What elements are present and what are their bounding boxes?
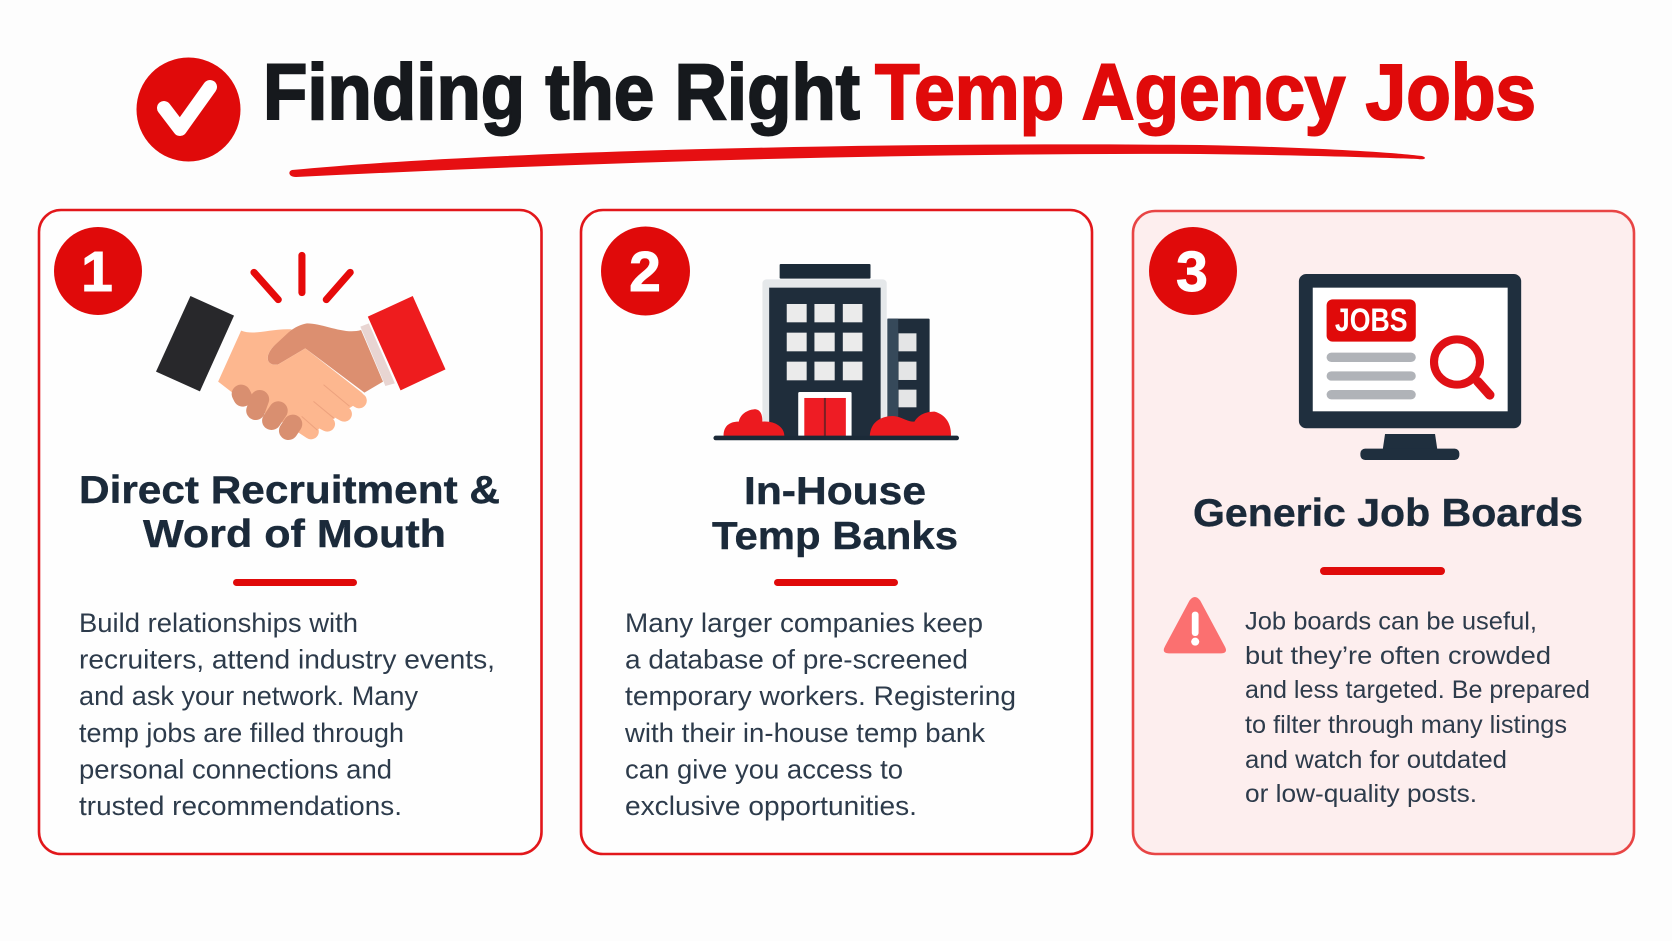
body text: temp jobs are filled through [79,718,404,748]
body text: temporary workers. Registering [625,681,1016,711]
body text: with their in-house temp bank [624,718,986,748]
title [263,47,1536,136]
heading: Generic Job Boards [1193,492,1583,535]
body text: and ask your network. Many [79,681,419,711]
body text: trusted recommendations. [79,791,402,821]
icon: title check badge [136,58,240,162]
warning text: but they’re often crowded [1245,642,1551,670]
warning text: Job boards can be useful, [1245,608,1537,636]
body text: can give you access to [625,754,903,784]
number badge 2: 2 [629,240,661,304]
icon: office building [713,264,959,440]
divider [233,579,357,586]
warning text: to filter through many listings [1245,711,1567,739]
body text [79,608,495,821]
body text: recruiters, attend industry events, [79,644,495,674]
panel: in-house temp banks [581,210,1092,854]
warning text: or low-quality posts. [1245,780,1477,808]
body text: a database of pre-screened [625,644,968,674]
title underline [289,144,1425,177]
heading: Word of Mouth [143,513,446,556]
body text: exclusive opportunities. [625,791,917,821]
number badge 2 [601,226,690,316]
warning text [1245,608,1590,808]
body text: personal connections and [79,754,392,784]
icon: monitor with job listings [1299,274,1521,460]
number badge 1 [54,227,142,315]
number badge 3: 3 [1176,240,1208,304]
heading [79,469,500,556]
icon: monitor with job listings: JOBS [1335,302,1408,338]
body text: Build relationships with [79,608,358,638]
divider [1320,567,1445,575]
heading: Temp Banks [712,515,958,558]
heading [712,470,958,558]
body text [624,608,1016,821]
warning text: and less targeted. Be prepared [1245,676,1590,704]
panel: generic job boards [1133,211,1634,854]
warning text: and watch for outdated [1245,746,1507,774]
body text: Many larger companies keep [625,608,983,638]
icon: warning triangle [1164,597,1226,653]
heading: Direct Recruitment & [79,469,500,512]
panel: direct recruitment [39,210,542,854]
divider [774,579,898,586]
title: Finding the Right [263,47,860,136]
number badge 1: 1 [81,240,113,304]
number badge 3 [1149,227,1237,315]
title: Temp Agency Jobs [875,47,1536,136]
heading: In-House [744,470,926,513]
icon: handshake [156,255,445,433]
